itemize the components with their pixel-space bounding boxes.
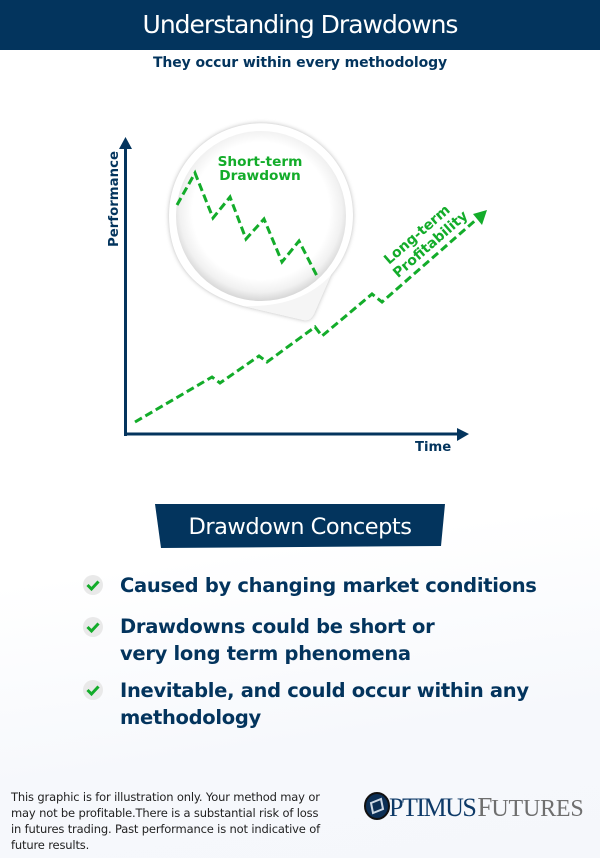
section heading: Drawdown Concepts [189,514,411,540]
disclaimer: in futures trading. Past performance is not indicative of [11,822,320,836]
disclaimer [10,790,320,852]
concept 2: very long term phenomena [120,642,411,665]
concept 2 [83,615,435,665]
disclaimer: future results. [11,838,89,852]
concept 3 [83,679,529,729]
concept 3: methodology [120,706,261,729]
check icon 2 [83,617,103,637]
disclaimer: This graphic is for illustration only. Your method may or [11,790,320,804]
x axis label: Time [415,440,451,455]
logo mark [364,792,390,820]
check icon 3 [83,680,103,700]
magnifier callout [169,123,353,320]
short-term label: Short-term [218,154,302,170]
subtitle: They occur within every methodology [153,55,447,71]
logo [364,792,584,822]
short-term label [218,154,302,184]
y axis [119,137,132,436]
check icon 1 [83,575,103,595]
x axis [124,428,469,441]
title banner [0,0,600,50]
section heading [155,504,445,548]
concept 1: Caused by changing market conditions [120,574,537,597]
long-term label: Long-term [381,202,454,268]
short-term label: Drawdown [219,168,301,184]
disclaimer: may not be profitable.There is a substantial risk of loss [11,806,318,820]
long-term profitability line [135,210,487,422]
long-term label: Profitability [390,208,471,281]
concept 3: Inevitable, and could occur within any [120,679,529,702]
title banner: Understanding Drawdowns [143,10,457,39]
short-term drawdown line [177,173,318,278]
concept 2: Drawdowns could be short or [120,615,434,638]
logo wordmark: PTIMUSFUTURES [389,792,584,822]
y axis label: Performance [107,151,122,247]
chart [107,120,487,455]
